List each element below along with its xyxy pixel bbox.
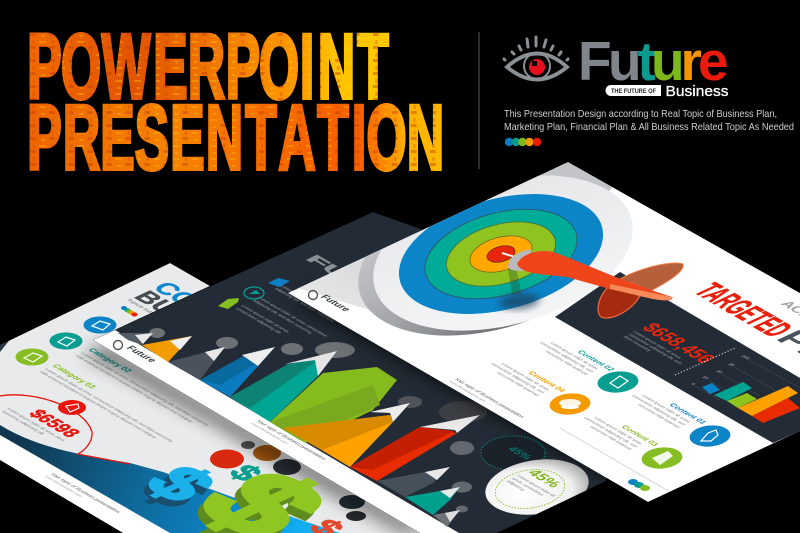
teal dollar sign: $ — [220, 460, 271, 486]
wordmark: Future: r — [680, 30, 702, 92]
blue dollar sign: $ — [126, 457, 234, 511]
dart body — [517, 251, 673, 300]
price: Lorem ipsum dolor sit amet, — [632, 330, 683, 359]
slide text lines: consectetur adipiscing elit — [235, 307, 283, 334]
wordmark: Future: t — [638, 30, 656, 92]
dart ring — [508, 250, 532, 271]
slide text lines: adipiscing elit, sed diam nonummy — [252, 299, 315, 335]
stat circle dark: 45% — [504, 445, 534, 461]
blue dollar sign — [144, 467, 212, 506]
logo block — [504, 30, 729, 100]
content 01: Lorem ipsum dolor sit amet, — [641, 394, 692, 423]
bar chart: 100 — [740, 354, 752, 360]
wordmark: Future: u — [608, 30, 642, 92]
ring: orange — [466, 230, 536, 278]
band logo: Future — [123, 345, 159, 364]
clouds — [149, 328, 487, 512]
icon: eye — [504, 37, 568, 80]
dart feather lower — [598, 282, 641, 318]
content 01: Content 01 — [667, 402, 709, 425]
footer text: www.domainname.com — [44, 475, 84, 498]
round icons — [241, 441, 366, 521]
icon: lime note — [16, 348, 48, 366]
logo: Future — [317, 294, 353, 313]
icon: blue cup — [84, 316, 116, 334]
red price callout: $6598 — [23, 407, 84, 440]
dart needle — [502, 253, 515, 257]
chart: gray peak 2 — [168, 347, 225, 380]
content 01 — [625, 387, 731, 448]
chart: gray peak small — [433, 510, 460, 527]
ring: green — [439, 211, 563, 297]
content 03 — [577, 409, 683, 470]
category 03 text: nibh euismod tincidunt ut laoreet dolore magna aliquam erat volutpat — [38, 370, 159, 439]
content 03: Content 03 — [619, 424, 661, 447]
bar chart: 0 — [690, 382, 697, 386]
footer text: www.domainname.com — [448, 380, 488, 403]
chart: teal peak — [230, 351, 337, 422]
stat circle white — [482, 453, 592, 521]
icon: red circle — [210, 450, 244, 468]
bar chart: 10 — [701, 375, 710, 380]
band logo — [114, 340, 159, 364]
bar chart: 25 — [727, 362, 736, 367]
slide logo: FU — [301, 253, 353, 281]
dotted divider — [675, 348, 735, 375]
white header band — [93, 330, 459, 533]
content 04: Content 04 — [526, 370, 569, 394]
bar chart — [690, 354, 800, 423]
blue dollar sign: $ — [121, 463, 229, 517]
slide text lines: Lorem ipsum dolor sit amet, consectetur — [257, 296, 329, 338]
content 02: Lorem ipsum dolor sit amet, — [549, 341, 600, 370]
stat circle white: 45% — [523, 467, 565, 490]
content 02: nonummy nibh euismod — [545, 350, 590, 376]
stat circle white: Lorem ipsum dolor sit — [516, 474, 557, 498]
content 04: nonummy nibh euismod — [496, 371, 541, 397]
content 04 — [484, 355, 591, 416]
target white disc — [356, 149, 650, 357]
category 02 text: nibh euismod tincidunt ut laoreet dolore magna aliquam erat volutpat — [74, 354, 195, 423]
chart: gray peak 3 — [377, 467, 450, 497]
band footer text: Your topic of Business presentation — [254, 419, 327, 461]
content 04: Lorem ipsum dolor sit amet, — [500, 362, 551, 391]
tagline pill: THE FUTURE OF — [611, 88, 656, 95]
category 02 text: Lorem ipsum dolor sit amet, consectetur adipiscing elit, sed diam nonummy — [80, 352, 211, 427]
slide title — [128, 283, 192, 314]
category 02 text: Category 02 — [86, 347, 134, 374]
content 04: consectetur adipiscing elit, sed — [490, 362, 546, 394]
icon: blue chart — [268, 278, 290, 287]
band footer text: www.domainname.com — [250, 422, 290, 445]
content 02 — [533, 334, 639, 394]
tagline pill — [606, 85, 661, 96]
bar chart: 20 — [715, 369, 724, 374]
footer rule — [560, 428, 670, 492]
blue wave — [0, 425, 340, 533]
slide 2 cast shadow — [85, 345, 430, 533]
content 03: Lorem ipsum dolor sit amet, — [593, 416, 644, 445]
slide 3: targeted plan — [288, 149, 800, 502]
slide text lines: Lorem ipsum dolor sit amet, — [240, 304, 291, 333]
slide text lines: adipiscing elit, sed diam nonummy — [274, 287, 337, 323]
chart: green peak — [270, 367, 397, 443]
price — [622, 320, 720, 367]
description text — [504, 109, 794, 133]
slide 3 cast shadow — [295, 290, 620, 480]
category 03 text: Lorem ipsum dolor sit amet, consectetur adipiscing elit, sed diam nonummy — [44, 368, 175, 443]
price: consectetur adipiscing elit, sed — [627, 333, 684, 365]
content 03: nonummy nibh euismod — [589, 425, 634, 451]
tagline word: Business: Business — [666, 83, 728, 100]
slide 2: mountain chart — [93, 212, 620, 533]
stat circle white: adipiscing — [505, 479, 527, 492]
target side crescent — [341, 154, 635, 362]
icon: teal box — [50, 332, 82, 350]
slide text lines — [236, 284, 334, 337]
target board — [341, 149, 650, 362]
price: diam nonummy — [622, 335, 653, 352]
chart: teal peak small — [405, 487, 460, 515]
chart: orange peak 1 — [142, 336, 192, 362]
chart: red peak — [350, 415, 480, 481]
title line: PRESENTATION: PRESENTATION — [27, 86, 444, 189]
footer band — [0, 429, 170, 533]
footer text: Your topic of Business presentation — [48, 472, 121, 514]
price: $658,456 — [636, 320, 720, 366]
icon: teal circle — [244, 287, 264, 299]
ring: blue — [386, 173, 616, 335]
slide 1: corporate business — [0, 263, 430, 533]
chart: orange peak 2 — [283, 403, 410, 467]
content 02: Content 02 — [575, 349, 617, 372]
icon: lime basket — [218, 298, 239, 309]
rainbow dots — [121, 306, 138, 316]
wordmark: Future: u — [651, 30, 685, 92]
title line: POWERPOINT: POWERPOINT — [27, 15, 389, 118]
content 03: consectetur adipiscing elit, sed — [583, 416, 639, 448]
dark panel — [555, 272, 800, 443]
title — [27, 15, 444, 189]
chart: gray peak 1 — [118, 333, 153, 345]
dart shadow — [500, 294, 540, 309]
wordmark: Future: e — [698, 30, 729, 92]
red price callout: nonummy adipiscing elit — [1, 410, 46, 436]
stat circle white: amet, consectetur — [511, 477, 546, 497]
axis grid — [695, 360, 800, 402]
red price callout — [0, 395, 130, 464]
dart shadow stem — [508, 268, 522, 295]
logo — [308, 290, 353, 313]
red price callout: Lorem ipsum dolor sit amet, circa — [6, 407, 67, 442]
footer text: Your topic of Business presentation — [452, 377, 525, 419]
slide title: BUSINESS — [128, 288, 263, 363]
footer logo dots — [628, 479, 650, 491]
divider — [478, 32, 480, 169]
green dollar sign — [198, 474, 322, 533]
wordmark: Future: F — [578, 30, 612, 92]
slide text lines: Lorem ipsum dolor sit amet, consectetur — [279, 284, 351, 326]
slide title: Topical Subject — [125, 298, 162, 319]
content 01: nonummy nibh euismod — [637, 403, 682, 429]
chart: blue peak — [200, 347, 275, 397]
gray backdrop — [297, 162, 612, 325]
ring: red — [485, 243, 517, 265]
category 03 text: Category 03 — [50, 363, 98, 390]
content 01: consectetur adipiscing elit, sed — [631, 394, 687, 426]
stat circle dark — [481, 436, 545, 470]
dart — [502, 250, 673, 300]
ring: teal — [415, 194, 587, 314]
dart feather upper — [610, 263, 683, 296]
colour dots — [505, 138, 541, 146]
slide title: CORPORATE — [147, 279, 308, 369]
dark corner accent — [0, 340, 10, 352]
content 02: consectetur adipiscing elit, sed — [539, 341, 595, 373]
